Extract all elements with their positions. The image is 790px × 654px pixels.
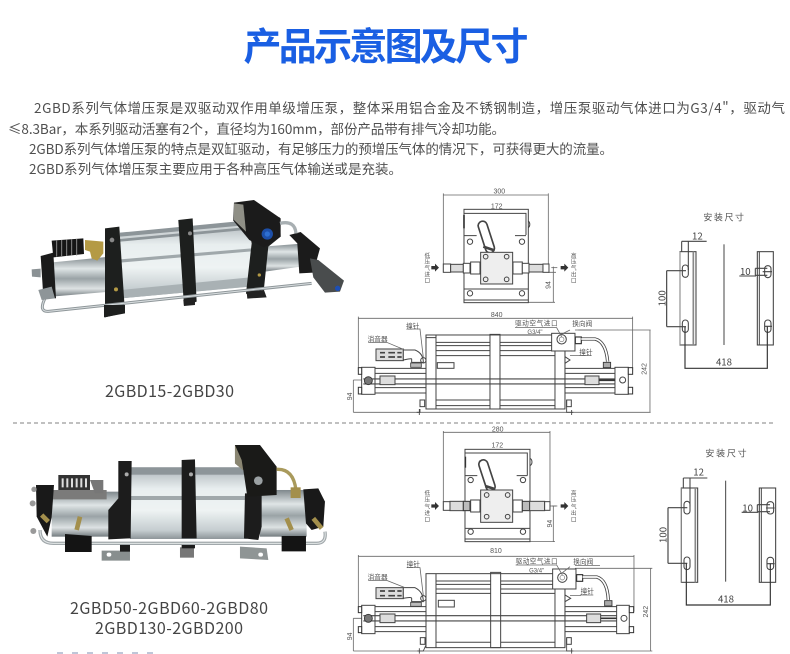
drawing: end view bbox=[424, 426, 577, 542]
drawing: end view: 口 bbox=[571, 276, 576, 285]
drawing: end view: 172 bbox=[491, 443, 503, 450]
drawing: end view: 出 bbox=[571, 508, 577, 517]
drawing: end view: 压 bbox=[571, 257, 577, 266]
drawing: end view: 进 bbox=[424, 508, 430, 517]
drawing: end view: 气 bbox=[424, 501, 430, 510]
mounting dimensions: upper: 安装尺寸 bbox=[703, 211, 744, 224]
drawing: side view: 撞针 bbox=[579, 347, 593, 357]
drawing: end view: 280 bbox=[492, 426, 504, 433]
mounting dimensions: upper: 418 bbox=[716, 355, 732, 369]
drawing: side view: 撞针 bbox=[407, 558, 420, 568]
text block: product description: ≤8.3Bar，本系列驱动活塞有2个，直径均为160mm，部份产品带有排气冷却功能。 bbox=[8, 118, 505, 138]
text block: product description: 2GBD系列气体增压泵是双驱动双作用单级增压泵，整体采用铝合金及不锈钢制造，增压泵驱动气体进口为G3/4"，驱动气 bbox=[34, 97, 785, 117]
drawing: side view: 242 bbox=[642, 363, 649, 375]
drawing: end view: 172 bbox=[491, 203, 503, 210]
drawing: end view: 口 bbox=[571, 515, 576, 524]
model label: 2GBD130-2GBD200: 2GBD130-2GBD200 bbox=[95, 615, 243, 639]
technical drawing: 2GBD50-2GBD200 views bbox=[347, 426, 652, 654]
drawing: end view: 高 bbox=[571, 250, 577, 259]
drawing: side view: 810 bbox=[490, 548, 502, 555]
text block: product description: 2GBD系列气体增压泵主要应用于各种高压气体输送或是充装。 bbox=[29, 158, 402, 178]
drawing: side view: G3/4" bbox=[529, 569, 544, 575]
text block: product description: 2GBD系列气体增压泵的特点是双缸驱动，有足够压力的预增压气体的情况下，可获得更大的流量。 bbox=[29, 138, 613, 158]
drawing: side view: 840 bbox=[491, 312, 503, 319]
drawing: side view: 242 bbox=[643, 606, 650, 617]
mounting dimensions: lower: 418 bbox=[718, 592, 734, 606]
faint cropped text at bottom edge bbox=[57, 652, 153, 654]
mounting dimensions: lower: 安装尺寸 bbox=[705, 447, 747, 460]
technical drawing: 2GBD15-2GBD30 views bbox=[347, 188, 651, 415]
drawing: side view: 换向阀 bbox=[573, 556, 594, 566]
mounting dimensions: lower: 100 bbox=[656, 527, 670, 543]
drawing: end view: 压 bbox=[424, 495, 430, 504]
drawing: side view: 驱动空气进口 bbox=[516, 556, 558, 566]
divider bbox=[13, 422, 776, 424]
drawing: side view: 撞针 bbox=[581, 585, 594, 595]
drawing: end view: 出 bbox=[571, 269, 577, 278]
drawing: end view: 压 bbox=[424, 257, 430, 266]
mounting dimensions: lower bbox=[656, 447, 776, 606]
drawing: end view: 进 bbox=[424, 269, 430, 278]
drawing: side view: 驱动空气进口 bbox=[515, 317, 558, 327]
drawing: end view: 94 bbox=[547, 520, 554, 528]
drawing: end view: 高 bbox=[571, 488, 577, 497]
mounting dimensions: upper bbox=[655, 211, 773, 369]
drawing: end view: 口 bbox=[424, 276, 430, 285]
title: 产品示意图及尺寸 bbox=[244, 16, 528, 71]
mounting dimensions: upper: 10 bbox=[740, 264, 751, 278]
drawing: end view: 气 bbox=[571, 263, 577, 272]
drawing: end view bbox=[424, 188, 577, 303]
drawing: side view: 94 bbox=[347, 392, 354, 400]
photo: 2GBD15-2GBD30 booster pump bbox=[32, 200, 344, 317]
drawing: side view: G3/4" bbox=[527, 330, 543, 336]
drawing: end view: 低 bbox=[424, 488, 430, 497]
drawing: side view bbox=[347, 312, 651, 415]
mounting dimensions: lower: 12 bbox=[693, 464, 704, 478]
drawing: side view: 消音器 bbox=[368, 333, 388, 343]
text block: product description bbox=[8, 97, 785, 178]
drawing: end view: 压 bbox=[571, 495, 577, 504]
drawing: side view: 94 bbox=[347, 632, 354, 640]
drawing: end view: 气 bbox=[424, 263, 430, 272]
photo: 2GBD50-2GBD200 booster pump bbox=[30, 445, 325, 561]
drawing: side view: 换向阀 bbox=[572, 318, 593, 328]
mounting dimensions: upper: 12 bbox=[692, 228, 703, 242]
drawing: end view: 低 bbox=[424, 250, 430, 259]
drawing: end view: 300 bbox=[493, 188, 505, 195]
drawing: side view: 消音器 bbox=[368, 571, 388, 581]
mounting dimensions: lower: 10 bbox=[742, 501, 753, 515]
model label: 2GBD15-2GBD30: 2GBD15-2GBD30 bbox=[105, 378, 234, 402]
model label: 2GBD50-2GBD60-2GBD80: 2GBD50-2GBD60-2GBD80 bbox=[70, 595, 268, 619]
mounting dimensions: upper: 100 bbox=[655, 290, 669, 306]
drawing: side view bbox=[347, 548, 652, 654]
drawing: end view: 口 bbox=[424, 515, 430, 524]
drawing: end view: 气 bbox=[571, 501, 577, 510]
drawing: end view: 94 bbox=[546, 281, 553, 289]
drawing: side view: 撞针 bbox=[406, 320, 420, 330]
